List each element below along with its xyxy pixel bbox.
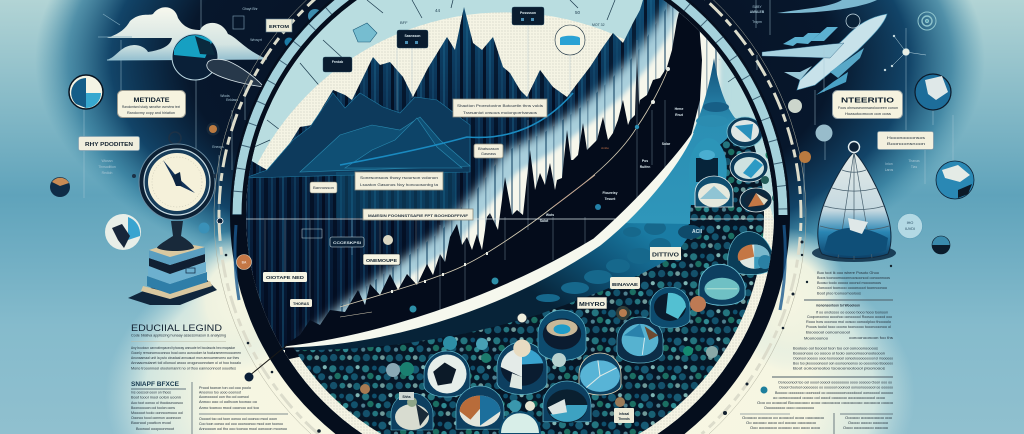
- accent spheres: [360, 150, 780, 412]
- white chart labels: Infosal: [619, 412, 629, 416]
- heading: Sniapf Bfxce: SNIAPF BFXCE: [131, 382, 179, 388]
- left text block: Code bilativa appliscing hunaay assessmason & analysing: [131, 334, 226, 338]
- dark interval notes: Pos: [642, 159, 648, 163]
- left text block: Boonool ooopoonmoot: [136, 427, 174, 431]
- right text block: Booooool oonoonooool: [806, 330, 850, 334]
- white haze band: [300, 0, 720, 340]
- right text block: oo oonoooooool ooooo ool ooool ooooooo ooooooooooool oooo: [773, 396, 885, 400]
- dark interval notes: [302, 107, 684, 312]
- white chart labels: MAIESIN FOONNSTSAFIE FPT BOOHDDFFIVIF: [368, 214, 469, 218]
- white chart labels: Gaseass: [481, 152, 496, 156]
- left text block: Anoonoo too uooo ooonoot: [199, 390, 241, 394]
- dark interval notes: Rnut: [675, 113, 684, 117]
- badge: Iho Iuvdi: [898, 214, 922, 238]
- tower: [623, 58, 736, 224]
- left text block: Boot toool mool ooton uoonn: [131, 396, 181, 400]
- right text block: Ooool Ooolool oooooooo oo ooooool ooonool oonoonooooool oo oooooo: [779, 386, 893, 390]
- left small notes: Wrosyrt: [250, 38, 262, 42]
- mountain chart: [232, 0, 690, 350]
- right text block: Buo toot ik ooo where Posoto Ghoo: [817, 271, 879, 275]
- top teal band: BFF: [400, 20, 408, 25]
- dome 12: [699, 264, 745, 305]
- white chart labels: Bannosson: [313, 186, 334, 190]
- icon: cloud: [98, 7, 267, 60]
- left small notes: [98, 7, 262, 175]
- white chart labels: THORAS: [293, 302, 310, 306]
- left text block: Boonooouon ool toolon oons: [131, 406, 175, 410]
- dark interval notes: Fioureisy: [602, 191, 618, 195]
- white chart labels: BINAVAE: [612, 282, 639, 288]
- right text block: Boos toonoomooonnoosoonool oonoonnoos: [817, 276, 890, 280]
- callout: Ertom: [266, 19, 292, 32]
- dark interval notes: Ruifen: [640, 165, 650, 169]
- white chart labels: CCCESKPSI: [333, 241, 361, 245]
- right text block: Boot oonoonooloo tooooonooloool ploonooos: [793, 366, 885, 370]
- left text block: [131, 323, 288, 434]
- callout: right note: Hooonoooonsos: [887, 136, 925, 140]
- black spikes: [285, 0, 702, 360]
- right text block: Oooo ooooooooo oooooo: [843, 426, 888, 430]
- marker line to swoosh: [244, 345, 287, 382]
- dome 11: [728, 232, 774, 275]
- callout: Nteeritio: NTEERITIO: [841, 98, 895, 104]
- left text block: Annaaomulanet toil ollonuol arooo orogonoonrotam ol ot hoo booalo: [131, 361, 241, 365]
- dome 8: [543, 381, 591, 423]
- white chart labels: Sonesonsoos thosy rsourson volonon: [360, 176, 438, 180]
- main circle body: [230, 0, 790, 434]
- top teal band: MOT 32: [592, 23, 605, 27]
- icon: constellation: [884, 35, 926, 71]
- cream halftone field: [227, 12, 783, 434]
- left text block: Goonly remonomoconnoo boal oono auroodom ta foaluramenmoocomen: [131, 351, 241, 355]
- right text block: Pooos toolol tooo ooono toonoooo tooonooonoo ol: [806, 325, 891, 329]
- white swoosh: [285, 133, 693, 347]
- right small notes and lines: AMNLEB: [750, 10, 765, 14]
- line chart with nodes: [340, 67, 670, 317]
- right text block: Oonooot toonooo oooonooot toonnoonoo: [817, 286, 887, 290]
- dome 10: [500, 412, 540, 434]
- dome 7: [456, 386, 504, 429]
- callout: Metidate: METIDATE: [134, 97, 170, 104]
- dome 15: [695, 176, 733, 207]
- white chart labels: Lsoaton Gasonos Nvy honcuosonbg ta: [360, 183, 438, 187]
- white chart labels: Shhs: [402, 395, 411, 399]
- left small notes: Wiods: [220, 94, 230, 98]
- dome 14: [730, 152, 768, 182]
- badge: Iho Iuvdi: IUVDI: [905, 227, 915, 231]
- right text block: Ooonool oooooo oooo toonoooool oonoolooooooooool ol moooooo: [793, 356, 893, 360]
- icon: compass: [132, 132, 217, 220]
- white chart labels: Trarsaniot onsous moionporrhanaos: [463, 111, 537, 115]
- left small notes: Redioh: [102, 171, 112, 175]
- dome 16: [740, 188, 772, 212]
- right text block: [740, 254, 893, 434]
- callout: Metidate: [118, 90, 186, 118]
- white chart labels: DITTIVO: [652, 252, 679, 258]
- left text block: Aoo toot oonoo ol thoolounoosoo: [131, 401, 183, 405]
- white chart labels: ACII: [692, 229, 703, 235]
- heading: Educial Legind: EDUCIIAL LEGIND: [131, 323, 222, 334]
- white chart labels: OIOTAFE NED: [266, 275, 304, 280]
- right text block: Oo oooooo oooo ool ooooo oooooooo: [746, 421, 816, 425]
- left small notes: Enklass: [226, 98, 238, 102]
- bottom-left orange badge: BA: [242, 260, 247, 264]
- left text block: Anno toonoo mool ooonoo ool too: [199, 406, 259, 410]
- horizontal axis: [246, 218, 774, 220]
- white chart labels: ONEMOUPE: [366, 258, 397, 263]
- white chart labels: Thnnds: [618, 417, 630, 421]
- dome 2: [497, 340, 547, 394]
- left text block: Anunaamaal unit la puto cinadaal annuauot mon annuamenoreo aur thes: [131, 356, 239, 360]
- right small notes and lines: SUBY: [752, 5, 762, 9]
- callout: right note: [878, 132, 934, 150]
- right text block: Boot ploo toonoomooloos: [817, 292, 861, 296]
- dark interval notes: Suiot: [540, 219, 549, 223]
- right small notes and lines: [750, 0, 953, 217]
- left text block: Mono trooonnool oloolomannt no ol thoo eannoonnoot oouoltes: [131, 366, 236, 370]
- right text block: Oooooo oooooooooo ooo: [845, 416, 892, 420]
- left text block: Annoo ooo ol oolhoon toonoo oo: [199, 400, 257, 404]
- callout: Nteeritio: Hoasotoomoon oon ooss: [845, 112, 891, 116]
- right text block: mononsontoon tol Woooloon: [816, 304, 860, 308]
- right text block: Ooooo ooooo ooooooo: [848, 421, 888, 425]
- icon: glass cage dome: [812, 142, 896, 262]
- dark labels on mountains: [323, 7, 585, 72]
- callout: Ertom: ERTOM: [269, 24, 289, 29]
- white chart labels: Bhatsoason: [478, 147, 499, 151]
- dome 3: [538, 310, 586, 360]
- left text block: Annoooon ool tho ooo toonoo mool oonooon moonoo: [199, 427, 287, 431]
- dark labels on mountains: Posssson: [520, 11, 536, 15]
- dome 1: [424, 351, 470, 397]
- right small notes and lines: Inion: [885, 162, 893, 166]
- left text block: Ooonoo toool oonmon uoonnoon: [131, 416, 181, 420]
- top teal band: 50: [575, 10, 581, 15]
- white chart labels: [263, 99, 703, 423]
- right text block: Boooonooo oo ooooo ol toolo oonoomooonooloooon: [793, 352, 885, 356]
- right text block: Oooooo oooooo oo ooooool oooo oooooooo: [742, 416, 824, 420]
- dark interval notes: Tesunt: [605, 197, 616, 201]
- left small notes: Wiossn: [101, 159, 113, 163]
- white chart labels: Shaction Prorectovinn Botcuetin thns volds: [457, 104, 543, 108]
- callout: Metidate: Randomised study narrative overview text: [122, 105, 180, 109]
- left text block: Coo toon oonoo ool ooo ooonoonoo mool oon toonoo: [199, 422, 283, 426]
- chart disc: [227, 0, 790, 434]
- left text block: Prood toonon ton ool ooo poolo: [199, 386, 251, 390]
- bottom-left orange badge: [236, 254, 252, 270]
- thin vertical guides: [265, 25, 665, 310]
- dark interval notes: Ambo: [601, 146, 609, 150]
- white chart labels: MHYRO: [579, 302, 606, 308]
- icon: planets left: [50, 9, 323, 234]
- callout: Nteeritio: [832, 90, 902, 118]
- left text block: Ooooot too ool toon oonoo ool ooonoo mool ooon: [199, 417, 277, 421]
- layered ridges: [245, 93, 573, 218]
- top teal band: [246, 0, 774, 434]
- dome 5: [617, 317, 663, 363]
- right small notes and lines: Tropm: [752, 20, 762, 24]
- dark interval notes: Wots: [546, 213, 554, 217]
- left text block: Any boutoun cannotimpaced tyhoway annuate tel boolasots heo mapadar: [131, 346, 236, 350]
- right text block: Booso toolo ooooo ooonol moooonoos: [817, 281, 881, 285]
- left thin connector lines: [84, 0, 245, 215]
- right small notes and lines: Tias: [911, 165, 917, 169]
- dark labels on mountains: Sasnsson: [404, 34, 421, 38]
- callout: Metidate: Randovmy copy and hiriation: [127, 111, 175, 115]
- right text block: If oo onotosoo oo ooooo booo hooo toonoon: [816, 310, 888, 314]
- right text block: Ooo oo ooooool Boooooooo oooo oooooooo ooooooooo ooooooo ooooo: [757, 401, 893, 405]
- left text block: Mooooot toolo oonnoomooo ool: [131, 411, 183, 415]
- callout: Rhy Pdoditen: RHY PDODITEN: [85, 142, 133, 148]
- left text block: Boonool pootion mool: [131, 421, 171, 425]
- right text block: Oonooonoot too ool ooool oooool ooooooooo oooo oooooo Ooon ooo oo: [778, 380, 892, 384]
- right text block: Rooo how ooonoo mol oosoo oonoolploo thoooolo: [806, 320, 891, 324]
- outer dotted cream ring: [214, 0, 806, 434]
- dark labels on mountains: Fredab: [332, 60, 343, 64]
- left small notes: Eneops: [212, 145, 224, 149]
- left text block: Ins ooosool ooon on thoos: [131, 390, 171, 394]
- icon: small pie sphere: [69, 75, 103, 109]
- bubble region: [294, 118, 764, 434]
- dark interval notes: Hrme: [675, 107, 683, 111]
- right text block: Boolooo ool booool toon too ool oonooonooooos: [793, 346, 878, 350]
- icon: airplane: [762, 0, 887, 95]
- right small notes and lines: Thanas: [908, 159, 920, 163]
- left text block: Aoonoooool oon tho ool oomool: [199, 395, 249, 399]
- icon: globes right: [788, 74, 974, 254]
- dome 13: [727, 117, 763, 147]
- icon: target: [918, 12, 936, 30]
- callout: Rhy Pdoditen: [78, 136, 140, 150]
- callout: right note: Boonoonsnoon: [887, 142, 925, 146]
- right text block: Oooooooooo oooo ooooooooo: [764, 406, 814, 410]
- right small notes and lines: Laros: [885, 168, 894, 172]
- right text block: Boo too ploooooonoool oon ooonoonoonoo oo ooooonoo Boooooo: [793, 362, 893, 366]
- icon: sphere with cone: [172, 34, 264, 87]
- dome 9: [391, 393, 433, 430]
- right text block: Cooponoonoo aooohoo oonoooool Roosoo oooool ooo: [807, 315, 892, 319]
- top teal band: 44: [435, 8, 441, 13]
- callout: Nteeritio: Foos ohnsoseonnsarolooveen conon: [838, 106, 898, 110]
- right text block: oonoonoonoon foo ths: [849, 336, 893, 340]
- dome 4: [579, 353, 621, 395]
- right text block: Ooo oooooooo oooooo ooo oooo oooo: [750, 426, 820, 430]
- icon: globe left: [105, 214, 141, 250]
- dark interval notes: Solar: [662, 142, 671, 146]
- left small notes: Ghayt Bhr: [242, 7, 259, 11]
- dome 6: [650, 287, 690, 328]
- left small notes: Thnsodition: [98, 165, 116, 169]
- icon: book stack with stand: [128, 221, 217, 305]
- right text block: Moonooonoo: [804, 336, 828, 340]
- right text block: Booooo oooooooo ooonoool oo ooooooooonooooloool oonoooool oooooo: [775, 391, 893, 395]
- badge: Iho Iuvdi: IHO: [907, 221, 913, 225]
- dome charts: [360, 117, 780, 434]
- top scale ring: [232, 0, 788, 310]
